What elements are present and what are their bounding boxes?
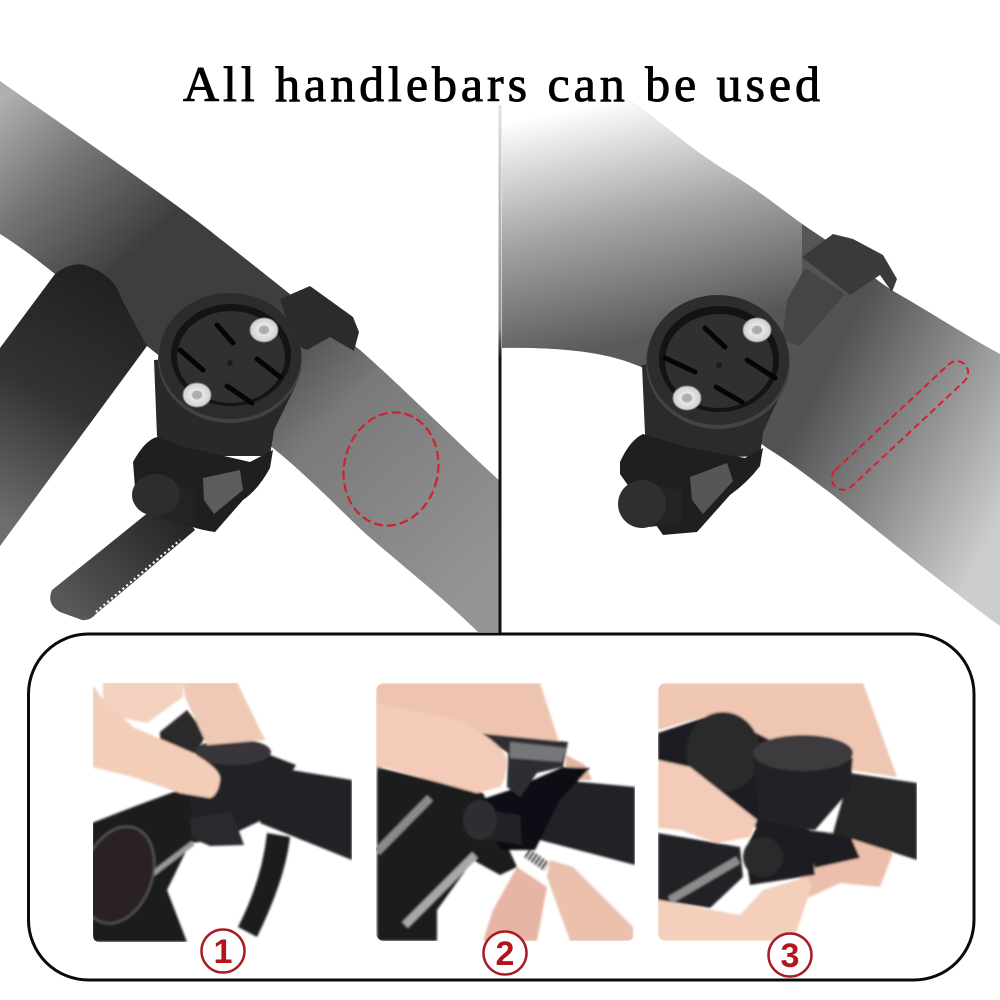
- metal cam: [690, 463, 733, 514]
- strap clamp: [802, 234, 897, 295]
- step 3 number: [768, 934, 812, 976]
- flat handlebar tube: [502, 100, 1000, 640]
- screw top: [250, 318, 278, 342]
- mount on aero bar: [618, 234, 897, 535]
- handlebar stem: [0, 264, 147, 546]
- panel: round handlebar: [0, 70, 500, 640]
- lever housing: [133, 437, 273, 532]
- red dashed contact circle: [333, 403, 449, 535]
- tension knob: [132, 474, 195, 525]
- step 1 number: [202, 930, 244, 972]
- metal cam: [203, 470, 243, 514]
- serrated lever: [50, 495, 195, 620]
- step 3 photo: [658, 683, 917, 941]
- step 2 number: 2: [496, 935, 514, 973]
- mount face: [646, 295, 790, 429]
- screw top: [743, 318, 771, 342]
- title: All handlebars can be used: [183, 56, 820, 112]
- rounded frame: [28, 634, 974, 980]
- step 2 photo: [376, 683, 635, 941]
- red dashed contact strip: [827, 356, 973, 495]
- panel: installation steps: [28, 634, 974, 980]
- mount face: [158, 293, 302, 423]
- panel: aero handlebar: [502, 100, 1000, 640]
- step 1 number: 1: [214, 933, 232, 971]
- mount on round bar: [50, 286, 359, 620]
- panel divider line: [498, 105, 502, 633]
- screw bottom: [673, 386, 701, 410]
- mount body: [642, 350, 785, 460]
- lever housing: [620, 434, 763, 535]
- step 2 number: [484, 932, 526, 974]
- step 3 number: 3: [781, 937, 799, 975]
- mount body: [154, 350, 300, 456]
- thin strap: [782, 268, 845, 346]
- tension knob: [618, 480, 682, 528]
- step 1 photo: [69, 682, 352, 942]
- screw bottom: [183, 383, 211, 407]
- rear strap clamp: [280, 286, 359, 351]
- round handlebar tube: [0, 70, 500, 640]
